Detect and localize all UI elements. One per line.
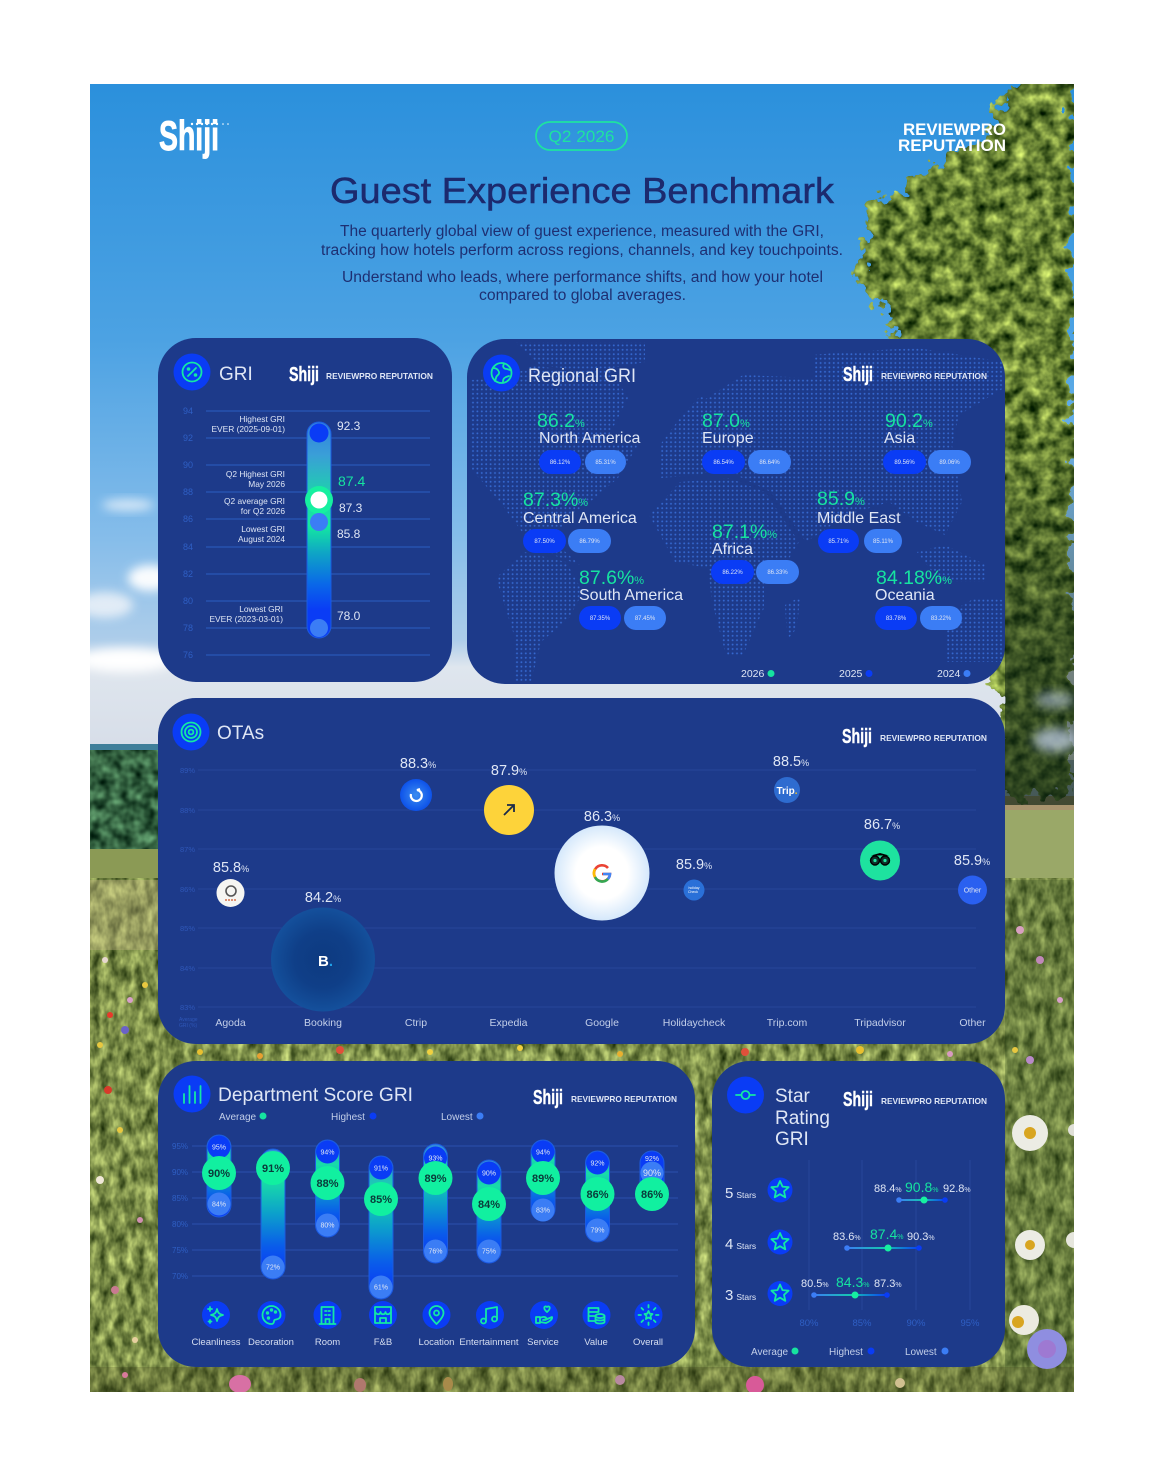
chart grid and y axis: 86% (180, 885, 195, 894)
bar: Overall: 86% (641, 1189, 663, 1201)
icon: F&B storefront (369, 1301, 397, 1329)
badge: Q2 2026 (536, 122, 627, 150)
legend: Lowest (905, 1347, 937, 1358)
logo: panel brand: REVIEWPRO REPUTATION (881, 371, 987, 381)
x axis labels: Google (585, 1017, 619, 1029)
region: North America: 86.12% (550, 460, 571, 466)
row: 5 Stars: 88.4% (874, 1183, 902, 1195)
region: Asia: 90.2% (885, 410, 933, 432)
region: Oceania: 84.18%% (876, 567, 952, 589)
row: 3 Stars: 80.5% (801, 1278, 829, 1290)
region: Middle East: 85.11% (873, 539, 894, 545)
bar: Room (310, 1140, 344, 1237)
bubble: Trip.com: 88.5% (773, 754, 809, 770)
icon: slider (727, 1076, 764, 1114)
region: Oceania (875, 567, 962, 630)
region: South America: South America (579, 587, 683, 604)
marker labels: May 2026 (248, 479, 285, 489)
bar: Cleanliness: 95% (212, 1144, 226, 1152)
chart grid and y axis: 84% (180, 964, 195, 973)
region: Africa: 87.1%% (712, 521, 777, 543)
intro text: tracking how hotels perform across regions, channels, and key touchpoints. (321, 242, 843, 259)
bubble: Booking: B. (318, 953, 333, 970)
marker values: 78.0 (337, 609, 361, 623)
legend: years: 2024 (937, 668, 961, 680)
bar: Room: 80% (320, 1222, 335, 1230)
row: 5 Stars (725, 1178, 971, 1204)
x axis labels: Trip.com (767, 1017, 807, 1029)
bubble: Google: 86.3% (584, 809, 620, 825)
region: Africa (711, 521, 799, 584)
marker labels (209, 414, 285, 624)
logo: panel brand (533, 1087, 677, 1109)
logo: ReviewPro Reputation (898, 120, 1006, 155)
legend: Average (751, 1347, 789, 1358)
bar: F&B: 61% (374, 1284, 388, 1292)
icon: Value coins (582, 1301, 610, 1329)
bubble: Agoda: 85.8% (213, 860, 249, 876)
bubble: Holidaycheck: holiday (688, 886, 700, 890)
bar: Entertainment: 75% (482, 1248, 496, 1256)
row: 3 Stars: 84.3% (836, 1274, 869, 1290)
chart grid and x axis: 90% (906, 1318, 926, 1329)
panel: Department Score GRI (158, 1061, 695, 1367)
region: Asia: 89.06% (939, 460, 960, 466)
intro text (321, 223, 843, 304)
marker values: 85.8 (337, 527, 361, 541)
bubble: Holidaycheck: Check (688, 890, 698, 894)
department labels: Location (419, 1337, 454, 1348)
department labels (191, 1337, 663, 1348)
legend: years (741, 668, 970, 680)
logo: Shiji: Shiji (159, 112, 219, 159)
heading: Star Rating GRI: GRI (775, 1129, 809, 1150)
region: Central America (523, 489, 637, 553)
bar: Service: 94% (536, 1150, 550, 1156)
row: 5 Stars: 5 Stars (725, 1185, 756, 1202)
marker values: 87.3 (339, 501, 363, 515)
marker values: 87.4 (338, 473, 365, 489)
legend: Highest (829, 1347, 863, 1358)
icon: globe (483, 354, 520, 392)
bar: Location (418, 1144, 452, 1263)
icon: Entertainment music note (476, 1301, 504, 1329)
bar: Overall: 92% (645, 1156, 659, 1163)
icon: Overall sun star (634, 1301, 662, 1329)
bubble: Ctrip (400, 756, 436, 811)
chart grid and y axis: 92 (183, 433, 193, 443)
region: Europe: 86.64% (759, 460, 780, 466)
bubble: Trip.com (773, 754, 809, 803)
chart grid and x axis (799, 1160, 980, 1329)
department labels: Cleanliness (191, 1337, 241, 1348)
region: Africa: Africa (712, 541, 753, 558)
bubble: Other (954, 853, 990, 904)
marker labels: August 2024 (238, 534, 285, 544)
region: Middle East: 85.9% (817, 488, 865, 510)
legend: years: 2025 (839, 668, 863, 680)
panel: OTAs (158, 698, 1005, 1044)
range bar with markers (305, 422, 333, 638)
bubble: Holidaycheck (676, 857, 712, 900)
bar: Service: 83% (536, 1208, 550, 1214)
bar: Cleanliness: 84% (212, 1202, 226, 1208)
row: 3 Stars (725, 1274, 902, 1306)
legend: years: 2026 (741, 668, 765, 680)
chart grid and y axis: 76 (183, 650, 193, 660)
department labels: F&B (374, 1337, 392, 1348)
department labels: Decoration (248, 1337, 294, 1348)
bar: Entertainment (472, 1160, 506, 1263)
marker values: 92.3 (337, 419, 361, 433)
chart grid and x axis: 95% (960, 1318, 980, 1329)
bar: Value: 79% (590, 1228, 605, 1234)
bar: Location: 76% (428, 1248, 443, 1256)
region: Central America: 87.3%% (523, 489, 588, 511)
region: Central America: 87.50% (534, 539, 555, 545)
bar: Overall (635, 1151, 669, 1211)
region: Europe: 87.0% (702, 410, 750, 432)
x axis labels: Ctrip (405, 1017, 427, 1029)
region: South America: 87.35% (590, 616, 611, 622)
bar: Value (580, 1151, 614, 1242)
bar: Decoration: 72% (266, 1264, 280, 1272)
region: North America: 85.31% (595, 460, 616, 466)
bubble: Google (554, 809, 650, 920)
chart grid and y axis: 88 (183, 487, 193, 497)
icon: Room building (314, 1301, 342, 1329)
panel: Regional GRI (467, 339, 1005, 684)
marker values (337, 419, 365, 623)
bubble: Booking (271, 890, 375, 1012)
region: North America: North America (539, 430, 640, 447)
chart grid and y axis: 82 (183, 569, 193, 579)
department labels: Service (527, 1337, 559, 1348)
chart grid and y axis: 85% (172, 1194, 188, 1203)
chart grid and y axis: 75% (172, 1246, 188, 1255)
region: North America (537, 410, 640, 474)
region: Central America: Central America (523, 510, 637, 527)
chart grid and y axis: Average (179, 1017, 198, 1023)
marker labels: EVER (2025-09-01) (211, 424, 285, 434)
logo: panel brand: REVIEWPRO REPUTATION (571, 1094, 677, 1104)
heading: Department Score GRI: Department Score GRI (218, 1085, 413, 1106)
region: Africa: 86.33% (767, 570, 788, 576)
badge: Q2 2026: Q2 2026 (548, 127, 614, 146)
marker labels: Q2 Highest GRI (226, 469, 285, 479)
bubble: Other: Other (964, 888, 982, 894)
logo: panel brand: Shiji (843, 364, 873, 386)
row: 4 Stars: 90.3% (907, 1231, 935, 1243)
row: 4 Stars (725, 1226, 935, 1254)
department labels: Entertainment (459, 1337, 519, 1348)
logo: ReviewPro Reputation: REPUTATION (898, 136, 1006, 155)
heading: OTAs: OTAs (217, 723, 264, 744)
chart grid and y axis: GRI (%) (179, 1023, 197, 1029)
bar: Cleanliness (202, 1135, 236, 1217)
bar: Decoration: 91% (262, 1163, 284, 1175)
heading: Star Rating GRI (775, 1086, 830, 1150)
chart grid and x axis: 80% (799, 1318, 819, 1329)
chart grid and y axis (183, 406, 430, 660)
chart grid and y axis: 95% (172, 1142, 188, 1151)
logo: panel brand (843, 364, 987, 386)
region: Oceania: 83.78% (886, 616, 907, 622)
legend (751, 1347, 948, 1358)
panel: Star Rating GRI (712, 1061, 1005, 1367)
bubble: Tripadvisor: 86.7% (864, 817, 900, 833)
bar: Value: 86% (586, 1189, 609, 1201)
icon: target (172, 714, 210, 750)
logo: panel brand (842, 726, 987, 748)
region: Asia: Asia (884, 430, 915, 447)
title: Guest Experience Benchmark (330, 170, 835, 211)
bubble: Ctrip: 88.3% (400, 756, 436, 772)
chart grid and y axis: 89% (180, 766, 195, 775)
region: Europe: 86.54% (713, 460, 734, 466)
region: North America: 86.2% (537, 410, 585, 432)
x axis labels: Agoda (215, 1017, 246, 1029)
logo: panel brand (843, 1089, 987, 1111)
marker labels: Lowest GRI (239, 604, 283, 614)
icon: bars (174, 1076, 210, 1112)
x axis labels: Expedia (490, 1017, 528, 1029)
intro text: compared to global averages. (479, 287, 686, 304)
bar: Service (526, 1140, 560, 1222)
department labels: Room (315, 1337, 340, 1348)
intro text: The quarterly global view of guest experience, measured with the GRI, (340, 223, 824, 240)
marker labels: EVER (2023-03-01) (209, 614, 283, 624)
background photo: sky, tree and meadow (75, 60, 1082, 1394)
region: South America: 87.45% (635, 616, 656, 622)
legend (219, 1112, 484, 1123)
region: Central America: 86.79% (579, 539, 600, 545)
marker labels: Lowest GRI (241, 524, 285, 534)
logo: panel brand: Shiji (289, 364, 319, 386)
legend: Average (219, 1112, 257, 1123)
region: Middle East: 85.71% (828, 539, 849, 545)
department labels: Value (584, 1337, 608, 1348)
chart grid and y axis: 86 (183, 514, 193, 524)
logo: panel brand: REVIEWPRO REPUTATION (881, 1096, 987, 1106)
bubble: Agoda (213, 860, 249, 907)
chart grid and y axis: 87% (180, 845, 195, 854)
region: Africa: 86.22% (722, 570, 743, 576)
region: Oceania: 83.22% (931, 616, 952, 622)
row: 4 Stars: 87.4% (870, 1226, 903, 1242)
heading: Star Rating GRI: Star (775, 1086, 811, 1107)
logo: ReviewPro Reputation: REVIEWPRO (903, 120, 1006, 139)
department labels: Overall (633, 1337, 663, 1348)
chart grid and y axis: 88% (180, 806, 195, 815)
chart grid and y axis: 94 (183, 406, 193, 416)
x axis labels: Other (959, 1017, 986, 1029)
bubble: Booking: 84.2% (305, 890, 341, 906)
bar: Room: 88% (316, 1178, 339, 1190)
chart grid and y axis: 90% (172, 1168, 188, 1177)
heading: Star Rating GRI: Rating (775, 1108, 830, 1129)
region: South America: 87.6%% (579, 567, 644, 589)
bar: Entertainment: 84% (478, 1199, 500, 1211)
icon: Decoration palette (258, 1301, 286, 1329)
row: 5 Stars: 92.8% (943, 1183, 971, 1195)
x axis labels (215, 1017, 986, 1029)
region: Middle East (817, 488, 902, 553)
bubble: Trip.com: Trip. (776, 786, 798, 797)
bar: Cleanliness: 90% (208, 1168, 230, 1180)
region: Europe: Europe (702, 430, 754, 447)
x axis labels: Tripadvisor (854, 1017, 906, 1029)
bar: Location: 93% (428, 1156, 443, 1162)
bar: Overall: 90% (643, 1168, 661, 1178)
logo: panel brand: Shiji (533, 1087, 563, 1109)
bubble: Expedia (484, 763, 534, 835)
logo: panel brand (289, 364, 433, 386)
bubble: Tripadvisor (860, 817, 900, 880)
bar: Entertainment: 90% (482, 1170, 496, 1178)
legend: Lowest (441, 1112, 473, 1123)
region: South America (579, 567, 683, 630)
bar: F&B (364, 1156, 398, 1299)
chart grid and y axis: 80% (172, 1220, 188, 1229)
row: 4 Stars: 83.6% (833, 1231, 861, 1243)
bar: Value: 92% (590, 1160, 605, 1168)
bar: Room: 94% (320, 1150, 335, 1156)
bubble: Expedia: 87.9% (491, 763, 527, 779)
region: Europe (702, 410, 791, 474)
icon: Location pin (422, 1301, 450, 1329)
logo: panel brand: REVIEWPRO REPUTATION (326, 371, 433, 381)
region: Oceania: Oceania (875, 587, 935, 604)
chart grid and y axis: 85% (180, 924, 195, 933)
chart grid and y axis: 84 (183, 542, 193, 552)
row: 5 Stars: 90.8% (905, 1179, 938, 1195)
bubble: Other: 85.9% (954, 853, 990, 869)
bar: Location: 89% (424, 1173, 447, 1185)
row: 4 Stars: 4 Stars (725, 1236, 756, 1253)
intro text: Understand who leads, where performance shifts, and how your hotel (342, 269, 823, 286)
bar: Decoration (256, 1149, 290, 1279)
chart grid and y axis: 90 (183, 460, 193, 470)
chart grid and y axis: 80 (183, 596, 193, 606)
marker labels: for Q2 2026 (241, 506, 285, 516)
icon: percent (174, 354, 210, 390)
region: Middle East: Middle East (817, 510, 901, 527)
panel: GRI (158, 338, 452, 682)
x axis labels: Booking (304, 1017, 342, 1029)
marker labels: Q2 average GRI (224, 496, 285, 506)
region: Asia: 89.56% (894, 460, 915, 466)
row: 3 Stars: 87.3% (874, 1278, 902, 1290)
chart grid and x axis: 85% (852, 1318, 872, 1329)
chart grid and y axis: 78 (183, 623, 193, 633)
region: Asia (883, 410, 971, 474)
icon: Cleanliness sparkle (202, 1301, 230, 1329)
chart grid and y axis: 83% (180, 1003, 195, 1012)
bar: F&B: 91% (374, 1166, 388, 1172)
dotted world map (467, 339, 1005, 684)
x axis labels: Holidaycheck (663, 1017, 726, 1029)
bar: Service: 89% (532, 1173, 554, 1185)
chart grid and y axis (172, 1142, 678, 1281)
logo: panel brand: Shiji (842, 726, 872, 748)
logo: panel brand: Shiji (843, 1089, 873, 1111)
logo: panel brand: REVIEWPRO REPUTATION (880, 733, 987, 743)
icon: Service hand and heart (530, 1301, 558, 1329)
chart grid and y axis: 70% (172, 1272, 188, 1281)
heading: Regional GRI: Regional GRI (528, 366, 636, 387)
legend: Highest (331, 1112, 365, 1123)
bubble: Holidaycheck: 85.9% (676, 857, 712, 873)
row: 3 Stars: 3 Stars (725, 1287, 756, 1304)
chart grid and y axis (179, 766, 976, 1029)
marker labels: Highest GRI (239, 414, 285, 424)
bar: F&B: 85% (370, 1194, 392, 1206)
heading: GRI: GRI (219, 364, 253, 385)
